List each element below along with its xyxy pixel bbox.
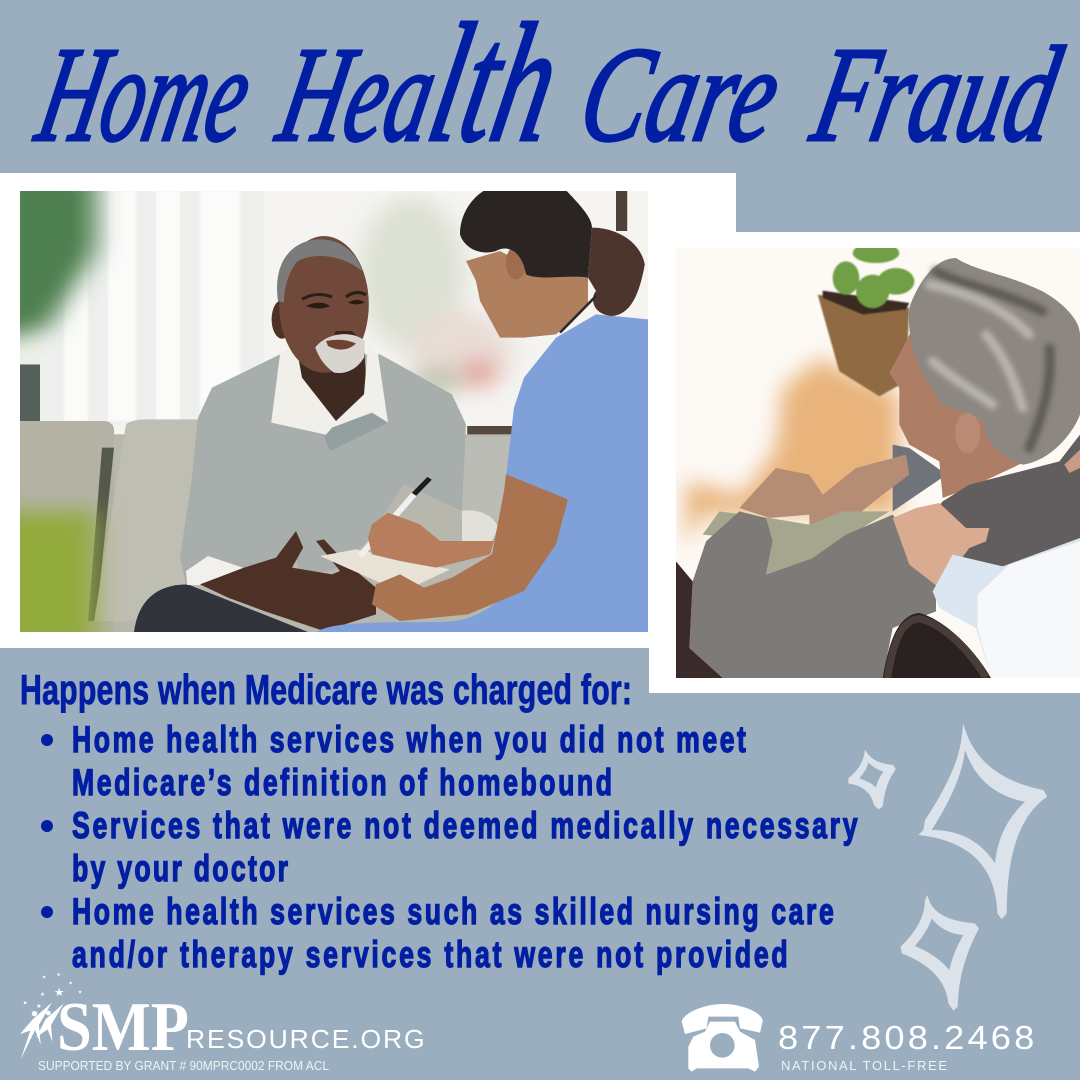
title: Home bbox=[25, 18, 264, 170]
nurse scrubs bbox=[316, 314, 648, 632]
photo: nurse talking with patient bbox=[20, 191, 648, 632]
wheelchair handle bbox=[883, 613, 991, 678]
woman's hair bbox=[909, 258, 1080, 465]
woman's sweater arm bbox=[689, 511, 936, 678]
logo: SMP bbox=[20, 972, 425, 1073]
logo stars: ★ bbox=[54, 985, 65, 999]
bullet 3: and/or therapy services that were not provided bbox=[72, 934, 788, 975]
icon: telephone bbox=[682, 1004, 763, 1072]
bullet 1: Medicare’s definition of homebound bbox=[72, 762, 612, 803]
woman's far sleeve bbox=[893, 445, 947, 511]
icon: sparkles bbox=[848, 723, 1047, 1011]
logo stars: ★ bbox=[36, 1003, 42, 1010]
man's hands bbox=[200, 531, 376, 631]
nurse head bbox=[466, 251, 588, 338]
bullet 1 bbox=[41, 719, 746, 803]
man bbox=[134, 584, 308, 632]
woman's sweater back bbox=[940, 434, 1080, 566]
logo figures bbox=[20, 1003, 64, 1059]
bullet 3 bbox=[41, 891, 834, 975]
bullet 2: by your doctor bbox=[72, 848, 288, 889]
curtain bbox=[40, 191, 264, 424]
green foliage blur bbox=[0, 171, 96, 651]
toll-free label: NATIONAL TOLL-FREE bbox=[781, 1058, 947, 1073]
left wheelchair frame bbox=[676, 561, 723, 678]
logo stars: ★ bbox=[69, 980, 73, 986]
clipboard and pen bbox=[320, 549, 450, 584]
woman's neck and face bbox=[890, 334, 1021, 498]
title: Care bbox=[569, 18, 793, 170]
logo stars: ★ bbox=[42, 975, 46, 981]
bullet 1: Home health services when you did not meet bbox=[72, 719, 746, 760]
caregiver hand bbox=[893, 503, 989, 588]
logo stars bbox=[23, 972, 82, 1010]
logo resource.org: RESOURCE.ORG bbox=[186, 1024, 425, 1054]
photo: caregiver with elderly woman bbox=[676, 243, 1080, 678]
white photo frame bbox=[0, 173, 1080, 693]
woman's hands bbox=[740, 454, 910, 524]
logo stars: ★ bbox=[78, 990, 82, 996]
bullet 2 bbox=[41, 805, 858, 889]
logo stars: ★ bbox=[56, 972, 61, 978]
phone number: 877.808.2468 bbox=[778, 1020, 1034, 1057]
potted plant bbox=[818, 243, 914, 396]
sofa bbox=[110, 434, 511, 632]
logo stars: ★ bbox=[40, 992, 45, 998]
logo SMP lettering: SMP bbox=[57, 989, 189, 1066]
heading: Happens when Medicare was charged for: bbox=[20, 666, 632, 713]
wood floor bbox=[686, 358, 899, 548]
window view bbox=[360, 198, 512, 394]
woman's lap bbox=[703, 511, 889, 575]
logo stars: ★ bbox=[23, 1000, 28, 1006]
logo grant line: SUPPORTED BY GRANT # 90MPRC0002 FROM ACL bbox=[38, 1059, 329, 1073]
bullet 3: Home health services such as skilled nursing care bbox=[72, 891, 834, 932]
caregiver sleeve bbox=[933, 538, 1080, 678]
nurse arms bbox=[368, 513, 494, 568]
bullet 2: Services that were not deemed medically necessary bbox=[72, 805, 858, 846]
title bbox=[25, 0, 1073, 178]
bullet list bbox=[41, 719, 858, 975]
